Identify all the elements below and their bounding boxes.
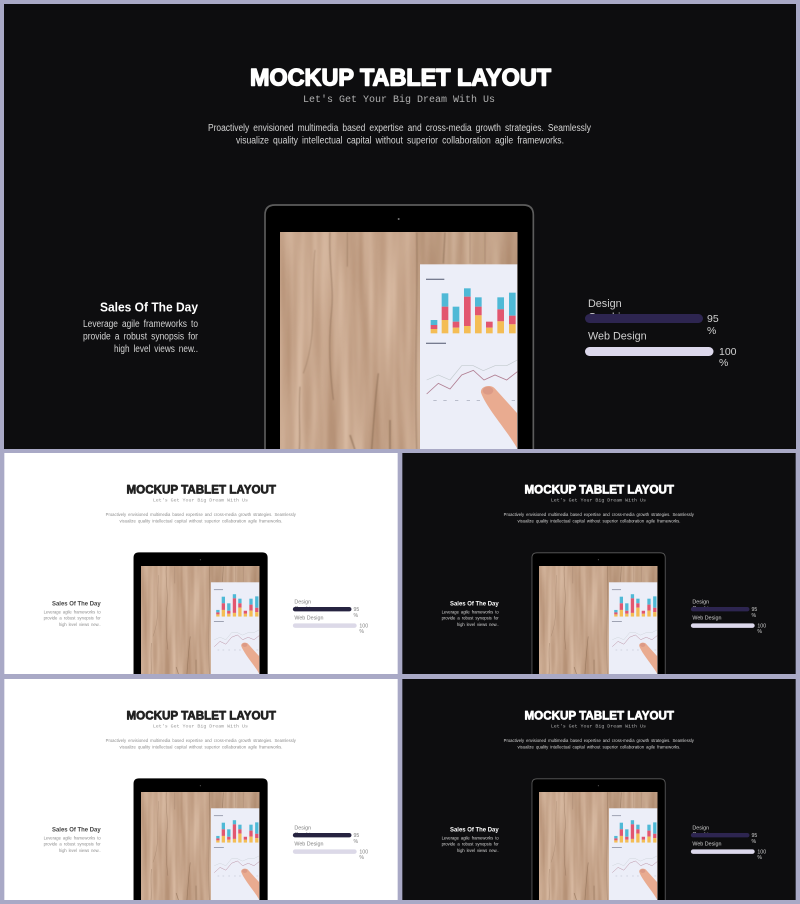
intro text: Proactively envisioned multimedia based expertise and cross-media growth strategies. Seamlessly [106, 512, 296, 518]
progress: design graphic: Graphic [692, 606, 711, 612]
progress: design graphic: 95 [353, 607, 359, 613]
progress: design graphic: Design [294, 599, 311, 605]
progress: design graphic: % [353, 613, 358, 619]
intro text [106, 738, 296, 750]
intro text: visualize quality intellectual capital without superior collaboration agile frameworks. [518, 518, 680, 524]
text block: sales of the day [442, 601, 499, 628]
progress: design graphic: % [707, 325, 716, 337]
panel: light slide row 3 [4, 679, 398, 900]
progress: design graphic: Graphic [692, 832, 711, 838]
text block: sales of the day: Leverage agile frameworks to [442, 835, 499, 841]
progress: web design: Web Design [692, 842, 721, 848]
progress: web design: % [757, 855, 762, 861]
subtitle: Let's Get Your Big Dream With Us [551, 498, 646, 504]
progress: web design: 100 [757, 623, 766, 629]
progress: web design: 100 [359, 623, 368, 629]
text block: sales of the day: high level views new.. [59, 848, 101, 854]
progress: design graphic: % [353, 839, 358, 845]
title: MOCKUP TABLET LAYOUT [127, 482, 277, 496]
progress: web design: Web Design [294, 616, 323, 622]
text block: sales of the day [44, 601, 101, 628]
intro text: visualize quality intellectual capital without superior collaboration agile frameworks. [120, 744, 282, 750]
text block: sales of the day [442, 827, 499, 854]
progress: web design: 100 [359, 849, 368, 855]
text block: sales of the day: high level views new.. [457, 622, 499, 628]
text block: sales of the day: provide a robust synopsis for [442, 842, 499, 848]
text block: sales of the day: high level views new.. [457, 848, 499, 854]
progress: design graphic: Graphic [294, 606, 313, 612]
progress: design graphic: Graphic [294, 832, 313, 838]
intro text [106, 512, 296, 524]
text block: sales of the day [83, 300, 199, 355]
intro text [504, 738, 694, 750]
panel: dark slide row 3 [402, 679, 796, 900]
progress: web design [691, 842, 766, 861]
progress: web design: % [757, 629, 762, 635]
text block: sales of the day: high level views new.. [59, 622, 101, 628]
progress: design graphic [691, 599, 757, 619]
panel: light slide row 2 [4, 453, 398, 674]
subtitle: Let's Get Your Big Dream With Us [551, 724, 646, 730]
title: MOCKUP TABLET LAYOUT [127, 708, 277, 722]
subtitle: Let's Get Your Big Dream With Us [153, 498, 248, 504]
progress: web design: Web Design [294, 842, 323, 848]
title: MOCKUP TABLET LAYOUT [525, 708, 675, 722]
intro text: visualize quality intellectual capital without superior collaboration agile frameworks. [120, 518, 282, 524]
progress: web design: 100 [757, 849, 766, 855]
tablet mockup [134, 779, 267, 900]
intro text: Proactively envisioned multimedia based expertise and cross-media growth strategies. Seamlessly [504, 738, 694, 744]
progress: web design: % [359, 629, 364, 635]
progress: design graphic: 95 [751, 833, 757, 839]
text block: sales of the day: provide a robust synopsis for [44, 842, 101, 848]
progress: design graphic [585, 298, 719, 337]
intro text: Proactively envisioned multimedia based expertise and cross-media growth strategies. Seamlessly [106, 738, 296, 744]
text block: sales of the day: provide a robust synopsis for [442, 616, 499, 622]
text block: sales of the day: Sales Of The Day [100, 300, 199, 314]
intro text: Proactively envisioned multimedia based expertise and cross-media growth strategies. Seamlessly [504, 512, 694, 518]
tablet mockup [532, 779, 665, 900]
text block: sales of the day: Leverage agile frameworks to [83, 319, 198, 330]
panel: main dark slide [4, 4, 796, 449]
progress: design graphic [293, 825, 359, 845]
intro text [504, 512, 694, 524]
tablet mockup [265, 205, 533, 450]
progress: design graphic [691, 825, 757, 845]
progress: web design [691, 616, 766, 635]
text block: sales of the day: Leverage agile frameworks to [442, 609, 499, 615]
progress: web design [585, 330, 737, 369]
progress: design graphic: Design [692, 599, 709, 605]
progress: design graphic: Design [588, 298, 622, 310]
title: MOCKUP TABLET LAYOUT [250, 64, 551, 92]
progress: design graphic: Design [692, 825, 709, 831]
progress: web design: % [359, 855, 364, 861]
progress: design graphic: % [751, 613, 756, 619]
text block: sales of the day: Sales Of The Day [52, 601, 101, 608]
intro text [208, 123, 591, 146]
tablet mockup [134, 553, 267, 674]
progress: web design: Web Design [692, 616, 721, 622]
text block: sales of the day: Sales Of The Day [52, 827, 101, 834]
intro text: visualize quality intellectual capital without superior collaboration agile frameworks. [518, 744, 680, 750]
progress: design graphic: Graphic [588, 312, 626, 324]
progress: design graphic: Design [294, 825, 311, 831]
tablet mockup [532, 553, 665, 674]
progress: web design: Web Design [588, 330, 647, 342]
progress: design graphic [293, 599, 359, 619]
progress: web design: 100 [719, 346, 737, 358]
intro text: visualize quality intellectual capital without superior collaboration agile frameworks. [236, 136, 564, 146]
text block: sales of the day: provide a robust synopsis for [44, 616, 101, 622]
intro text: Proactively envisioned multimedia based expertise and cross-media growth strategies. Seamlessly [208, 123, 591, 134]
text block: sales of the day: Leverage agile frameworks to [44, 835, 101, 841]
title: MOCKUP TABLET LAYOUT [525, 482, 675, 496]
progress: design graphic: 95 [353, 833, 359, 839]
text block: sales of the day [44, 827, 101, 854]
progress: design graphic: 95 [751, 607, 757, 613]
text block: sales of the day: provide a robust synopsis for [83, 332, 199, 342]
text block: sales of the day: Sales Of The Day [450, 601, 499, 608]
text block: sales of the day: high level views new.. [114, 344, 198, 355]
progress: web design [293, 616, 368, 635]
subtitle: Let's Get Your Big Dream With Us [153, 724, 248, 730]
progress: design graphic: 95 [707, 313, 719, 325]
subtitle: Let's Get Your Big Dream With Us [303, 94, 495, 106]
text block: sales of the day: Leverage agile frameworks to [44, 609, 101, 615]
text block: sales of the day: Sales Of The Day [450, 827, 499, 834]
progress: web design: % [719, 357, 728, 369]
progress: design graphic: % [751, 839, 756, 845]
panel: dark slide row 2 [402, 453, 796, 674]
progress: web design [293, 842, 368, 861]
